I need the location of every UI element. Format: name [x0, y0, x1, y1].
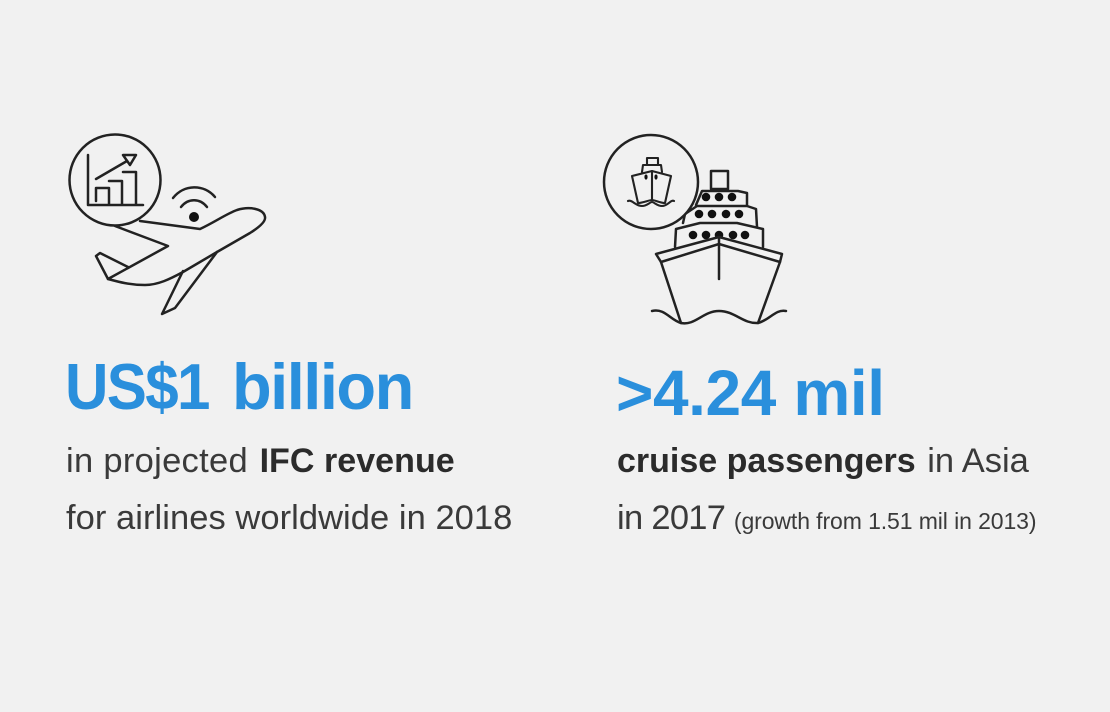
lower deck [675, 223, 763, 247]
funnel [711, 171, 728, 189]
heading: >4.24 mil: >4.24 mil [616, 357, 885, 429]
heading: US$1 billion [65, 350, 413, 423]
portholes [689, 193, 749, 239]
text: 2017 growth line: in 2017 (growth from 1.51 mil in 2013) [617, 499, 1036, 537]
top deck [696, 191, 747, 205]
heading: US$1 billion: US$1 [65, 350, 209, 423]
waves [652, 311, 786, 323]
icon: wifi signal [173, 187, 215, 222]
icon: small ship [628, 158, 674, 206]
plane body [108, 208, 265, 285]
icon: airplane with chart [68, 133, 266, 316]
text: IFC revenue line: in projected IFC revenue [66, 442, 455, 480]
plane tail [96, 253, 128, 279]
heading: US$1 billion: billion [232, 350, 413, 423]
ship circle [604, 135, 698, 229]
text: airlines line: for airlines worldwide in 2018 [66, 499, 512, 537]
chart circle [70, 134, 160, 226]
hull [656, 237, 782, 262]
middle deck [683, 206, 757, 227]
plane wing [162, 252, 217, 314]
icon: rising bar chart [88, 155, 143, 205]
icon: cruise ship [602, 134, 788, 325]
text: cruise passengers line: cruise passengers in Asia [617, 442, 1029, 480]
